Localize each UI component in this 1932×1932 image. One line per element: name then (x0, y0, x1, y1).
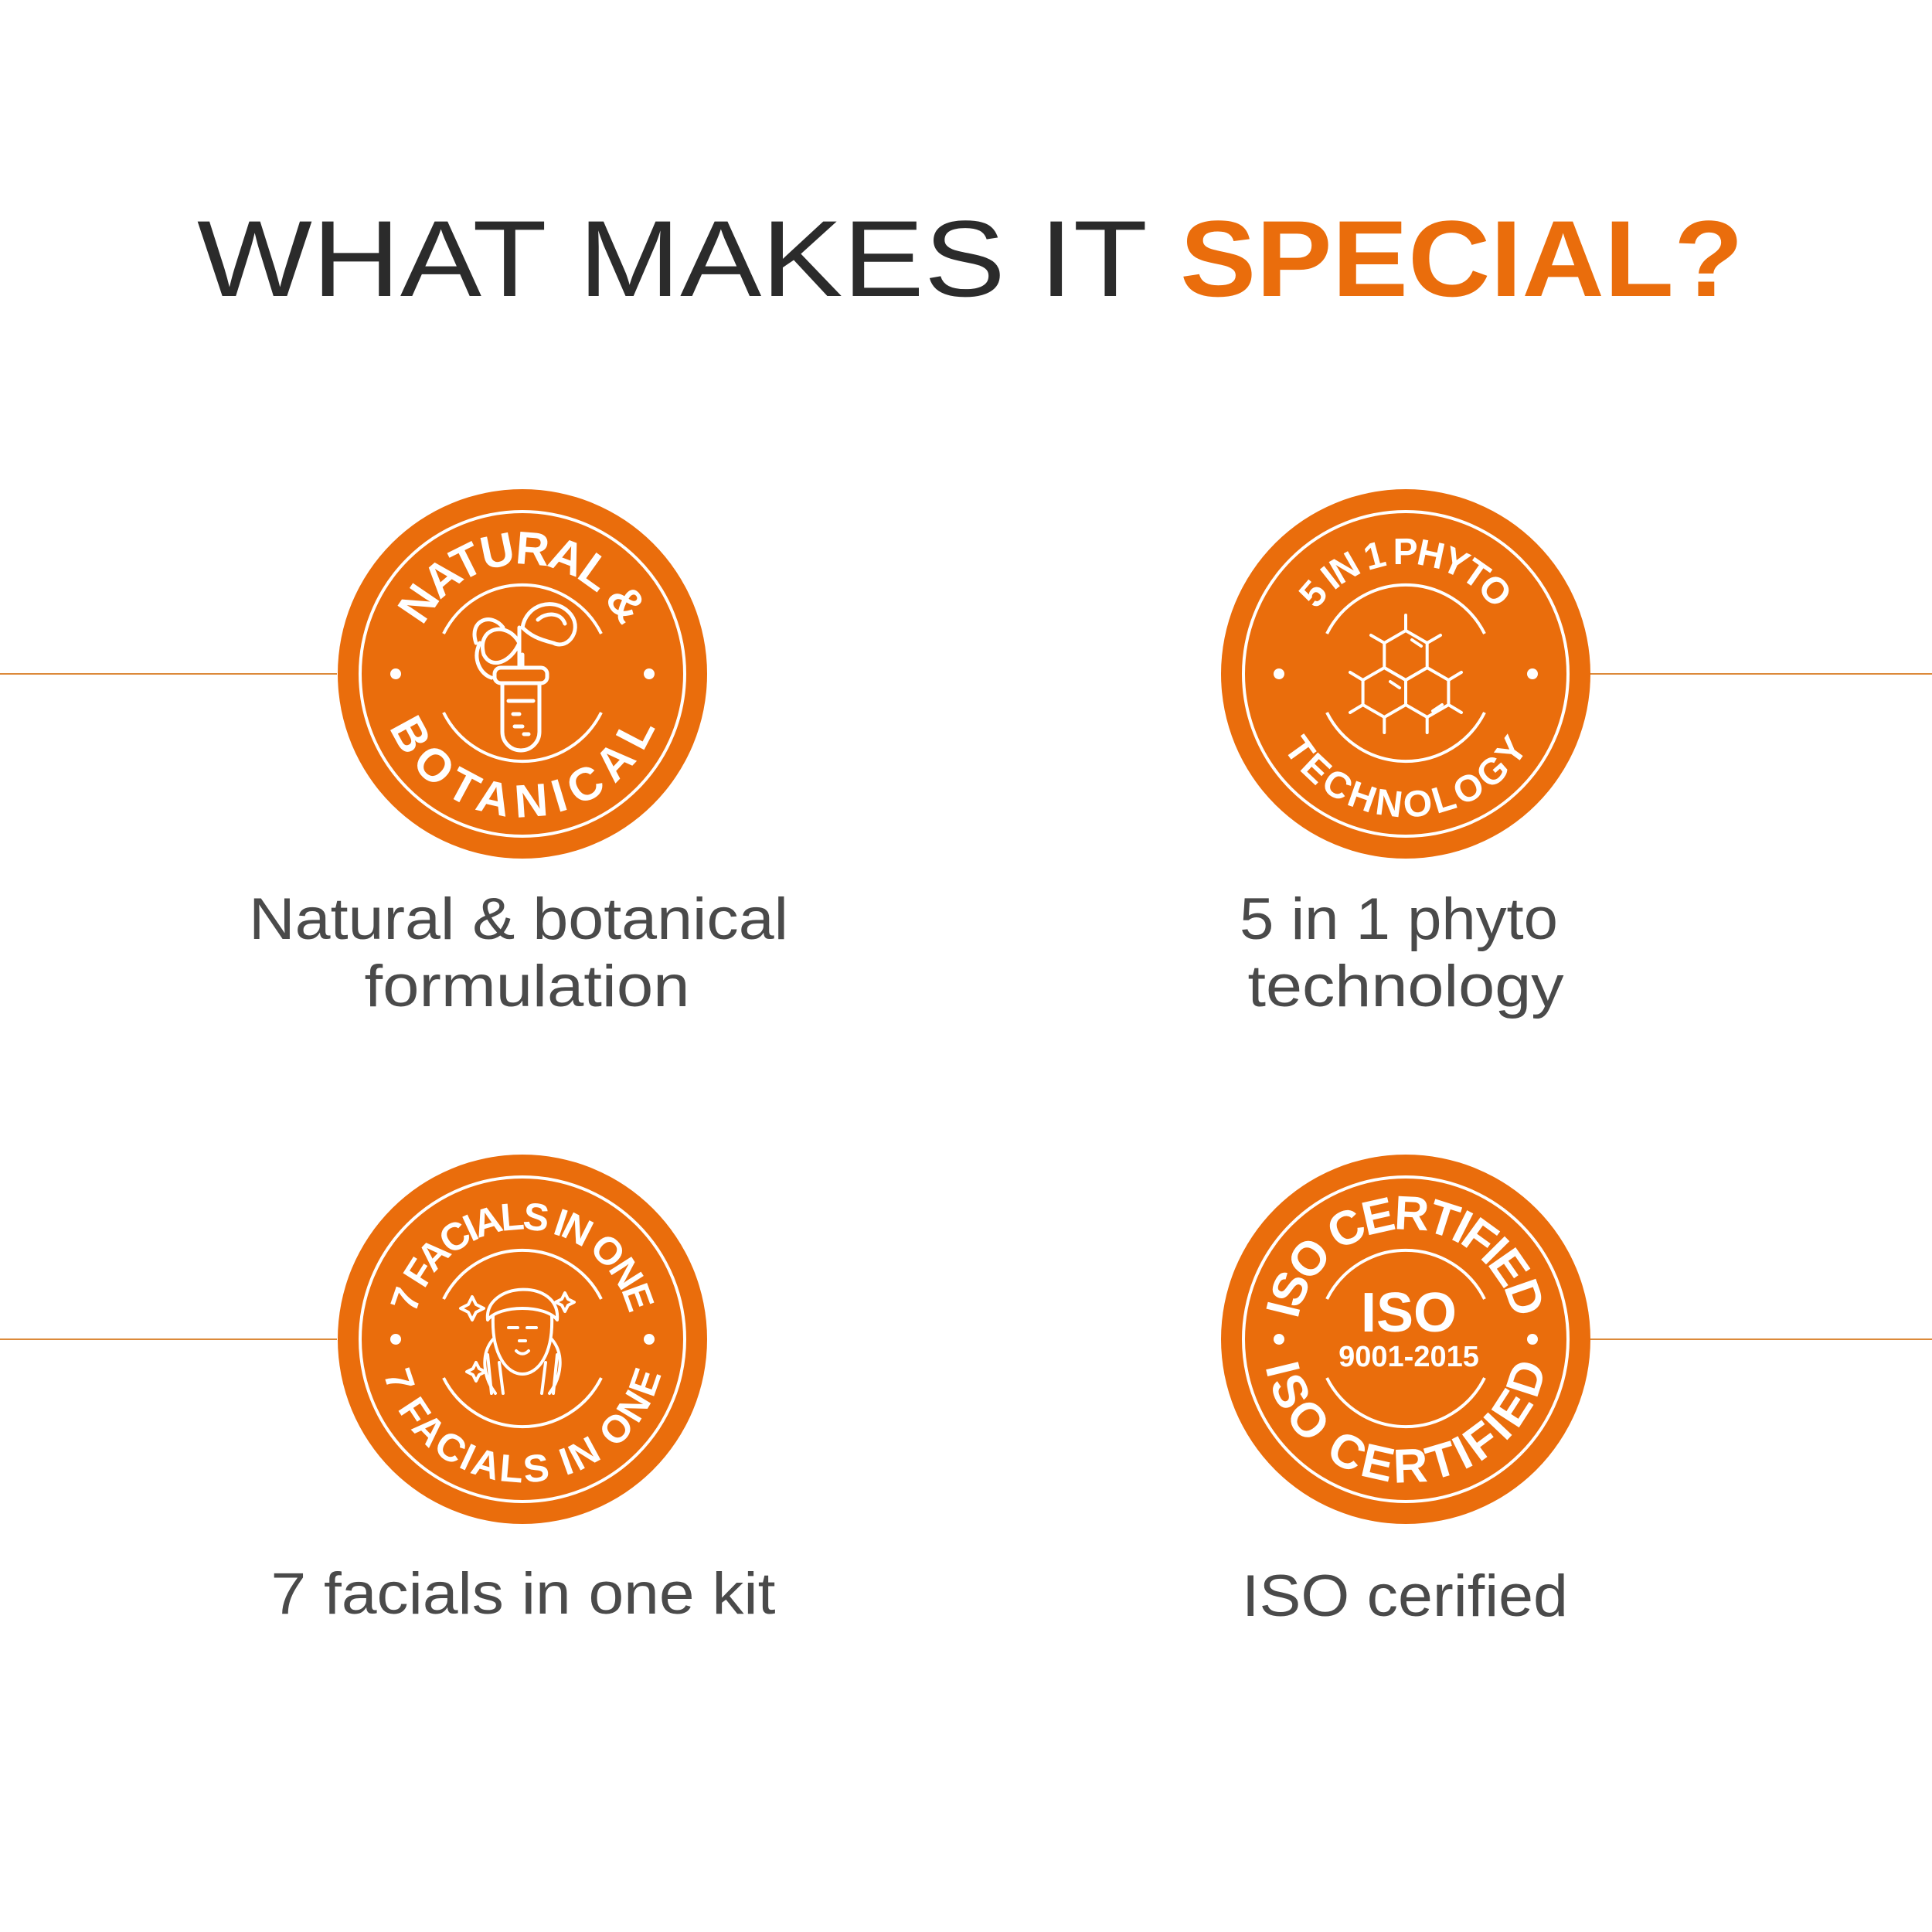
badge: natural & botanical (338, 489, 707, 859)
badge: natural & botanical: NATURAL & (397, 532, 641, 624)
caption: 5 in 1 phyto technology: 5 in 1 phyto (1240, 886, 1558, 952)
title: WHAT MAKES IT (197, 198, 1148, 319)
caption: 5 in 1 phyto technology (1240, 886, 1564, 1019)
caption: natural & botanical formulation: Natural & botanical (249, 886, 788, 952)
caption: natural & botanical formulation (249, 886, 788, 1019)
title: SPECIAL? (1180, 198, 1743, 319)
caption: 5 in 1 phyto technology: technology (1247, 954, 1564, 1019)
iso label: ISO (1361, 1282, 1457, 1344)
caption: ISO cerified: ISO cerified (1242, 1563, 1568, 1629)
connector line: badge 4 (1590, 1338, 1932, 1340)
badge: 7 facials in one: 7 FACIALS IN ONE (390, 1203, 654, 1312)
badge: ISO certified (1221, 1155, 1590, 1524)
badge: ISO certified: ISO CERTIFIED (1266, 1362, 1543, 1483)
iso label (1338, 1282, 1479, 1373)
icon: molecule hexagons (1350, 615, 1461, 733)
badge: 7 facials in one: 7 FACIALS IN ONE (385, 1367, 662, 1482)
badge: ISO certified: ISO CERTIFIED (1266, 1196, 1541, 1317)
badge: 5 in 1 phyto technology (1221, 489, 1590, 859)
badge: 5 in 1 phyto technology: TECHNOLOGY (1287, 733, 1523, 818)
icon: test tube with leaves (474, 604, 575, 750)
icon: face with hands (461, 1290, 574, 1393)
badge: natural & botanical: BOTANICAL (390, 715, 655, 818)
iso label: 9001-2015 (1338, 1341, 1479, 1373)
badge: 5 in 1 phyto technology: 5 IN 1 PHYTO (1298, 538, 1509, 606)
connector line: badge 3 (0, 1338, 337, 1340)
caption: 7 facials in one kit: 7 facials in one kit (270, 1561, 776, 1627)
connector line: badge 2 (1590, 673, 1932, 675)
caption: natural & botanical formulation: formulation (365, 954, 689, 1019)
title (197, 198, 1743, 319)
connector line: badge 1 (0, 673, 337, 675)
badge: 7 facials in one (338, 1155, 707, 1524)
